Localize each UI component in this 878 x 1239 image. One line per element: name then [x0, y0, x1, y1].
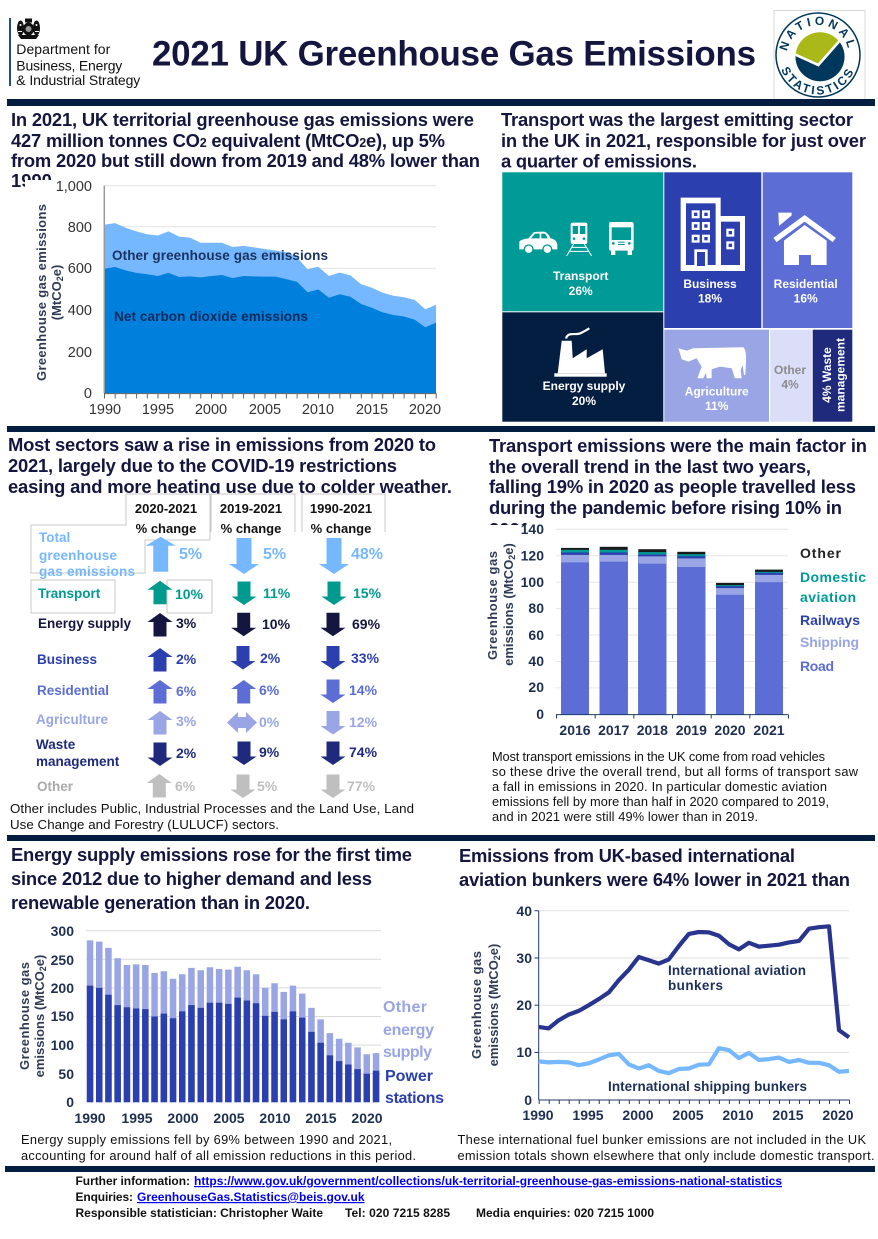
y axis labels	[51, 923, 74, 1110]
x axis labels: 2020	[822, 1107, 854, 1123]
bar: 2020	[716, 583, 744, 714]
footer: contact details: Tel: 020 7215 8285	[345, 1206, 450, 1220]
legend	[800, 545, 866, 674]
panel: sector changes	[8, 434, 452, 832]
y axis labels: 150	[51, 1008, 74, 1024]
panel: international bunkers	[458, 845, 874, 1163]
tile label: Business	[683, 277, 737, 291]
tile: agriculture	[664, 330, 769, 422]
heading: total emissions: from 2020 but still down from 2019 and 48% lower than	[11, 150, 480, 171]
y axis labels: 0	[66, 1094, 74, 1110]
y axis title	[34, 204, 65, 381]
tile: business	[664, 172, 761, 328]
y axis labels: 140	[521, 521, 544, 537]
panel: transport emissions	[480, 435, 875, 824]
label: Energy supply	[38, 616, 132, 631]
footer: contact details: https://www.gov.uk/government/collections/uk-territorial-greenhouse-gas-emissions-national-statistics	[194, 1174, 782, 1188]
x axis labels: 2019	[676, 722, 707, 738]
y axis labels: 800	[68, 220, 92, 236]
heading: sector changes: 2021, largely due to the COVID-19 restrictions	[8, 455, 397, 476]
row: agriculture: 12%	[349, 714, 378, 730]
logo divider line	[9, 18, 11, 86]
heading: energy supply: since 2012 due to higher demand and less	[11, 868, 372, 889]
row: business	[37, 646, 380, 672]
row: business: 2%	[176, 651, 197, 667]
heading: transport emissions: Transport emissions were the main factor in	[489, 435, 867, 456]
x axis labels: 2010	[259, 1110, 291, 1126]
tile label	[685, 384, 749, 413]
y axis title: emissions (MtCO	[32, 971, 47, 1077]
tile label: Energy supply	[543, 379, 626, 393]
y axis labels	[521, 521, 544, 722]
text block: bunkers note: emission totals shown elsewhere that only include domestic transport.	[458, 1148, 874, 1163]
heading: total emissions	[11, 109, 480, 191]
x axis labels	[74, 1110, 383, 1126]
text block: transport explanation: and in 2021 were still 49% lower than in 2019.	[492, 809, 758, 824]
footnote: other sectors: Use Change and Forestry (LULUCF) sectors.	[10, 817, 279, 832]
row: waste management: 74%	[349, 744, 378, 760]
column headers	[135, 501, 372, 536]
area: other greenhouse gas emissions	[104, 223, 436, 393]
y axis title: 2	[507, 555, 517, 560]
bar: 2019	[677, 552, 705, 714]
legend: Power	[385, 1068, 433, 1085]
heading: largest sector: Transport was the largest emitting sector	[501, 109, 853, 130]
y axis labels: 400	[68, 303, 92, 319]
heading: largest sector	[501, 109, 866, 172]
tile label	[683, 277, 737, 306]
tile label	[820, 338, 848, 412]
label	[39, 530, 135, 579]
icon: train	[567, 223, 592, 256]
icon: house	[775, 213, 834, 265]
row: business: 2%	[260, 650, 281, 666]
department name: Department for	[16, 41, 111, 57]
tile label	[543, 379, 626, 408]
area chart: emissions 1990-2021	[34, 179, 441, 418]
column headers: 1990-2021	[310, 501, 372, 516]
row: other	[37, 774, 376, 798]
icon: royal crest	[17, 18, 40, 39]
label: Business	[37, 652, 97, 667]
footer: contact details	[76, 1174, 782, 1220]
y axis labels: 200	[51, 980, 74, 996]
x axis labels: 2005	[213, 1110, 245, 1126]
text block: energy note: accounting for around half of all emission reductions in this period.	[21, 1148, 416, 1163]
tile label: Agriculture	[685, 384, 749, 398]
icon: factory	[554, 328, 607, 377]
x axis labels: 2020	[351, 1110, 383, 1126]
label	[36, 737, 120, 769]
row: total greenhouse gas emissions: 48%	[351, 546, 383, 563]
department name: Business, Energy	[16, 58, 122, 74]
tile label: 20%	[572, 394, 596, 408]
heading: bunkers: Emissions from UK-based international	[459, 845, 795, 866]
y axis title: e)	[501, 543, 516, 555]
heading: bunkers	[459, 845, 850, 890]
area: net carbon dioxide emissions	[104, 267, 436, 393]
footer: contact details: GreenhouseGas.Statistics@beis.gov.uk	[137, 1190, 365, 1204]
heading: energy supply: renewable generation than in 2020.	[11, 892, 310, 913]
text block: transport explanation: emissions fell by more than half in 2020 compared to 2019,	[492, 794, 829, 809]
bar: 2018	[638, 549, 666, 714]
x axis labels: 2015	[356, 402, 388, 418]
tile label: 4%	[781, 378, 799, 392]
x axis labels	[89, 402, 441, 418]
y axis labels: 1,000	[56, 179, 92, 195]
y axis title	[485, 543, 517, 666]
row: residential: 6%	[176, 683, 197, 699]
text block: bunkers note: These international fuel bunker emissions are not included in the UK	[458, 1132, 866, 1147]
label: Agriculture	[36, 712, 109, 727]
row: residential	[37, 680, 378, 704]
x axis labels: 2005	[249, 402, 281, 418]
tile: waste management	[813, 330, 852, 422]
icon: National Statistics logo: NATIONAL	[779, 16, 854, 51]
y axis labels: 250	[51, 952, 74, 968]
y axis title: Greenhouse gas emissions	[34, 204, 49, 381]
legend	[383, 999, 444, 1107]
x axis labels: 2000	[167, 1110, 199, 1126]
row: waste management	[36, 737, 378, 769]
legend: Other	[800, 545, 842, 561]
heading: total emissions: 427 million tonnes CO2 equivalent (MtCO2e), up 5%	[11, 130, 445, 151]
y axis labels: 40	[516, 903, 532, 919]
heading: transport emissions: 2021.	[489, 519, 535, 540]
row: other: 5%	[257, 778, 278, 794]
tile: transport	[502, 172, 663, 311]
tile label: 16%	[794, 292, 818, 306]
row: waste management: 9%	[259, 744, 280, 760]
footnote: other sectors: Other includes Public, Industrial Processes and the Land Use, Land	[10, 801, 414, 816]
x axis labels: 2015	[305, 1110, 337, 1126]
tile label	[774, 363, 806, 392]
label: Transport	[38, 586, 101, 601]
footnote: other sectors	[10, 801, 414, 832]
y axis title: Greenhouse gas	[17, 962, 32, 1070]
tile label: Transport	[553, 269, 608, 283]
series label: aviation: International aviation	[668, 963, 806, 978]
line: international shipping bunkers	[539, 1048, 849, 1073]
bar: 2017	[600, 547, 628, 714]
tile label	[774, 277, 838, 306]
row: agriculture: 0%	[259, 714, 280, 730]
icon: office buildings	[681, 198, 745, 271]
tile label: Residential	[774, 277, 838, 291]
x axis labels: 1995	[572, 1107, 604, 1123]
row: energy supply	[38, 613, 381, 636]
column headers: % change	[311, 521, 371, 536]
stacked bar chart: energy supply	[17, 923, 444, 1126]
legend: Railways	[800, 612, 860, 628]
heading: energy supply: Energy supply emissions rose for the first time	[11, 844, 412, 865]
text block: bunkers note	[458, 1132, 874, 1163]
row: energy supply: 3%	[176, 615, 197, 631]
row: transport: 10%	[175, 586, 204, 602]
y axis title: 2	[492, 955, 502, 960]
tile label	[553, 269, 608, 298]
heading: largest sector: in the UK in 2021, responsible for just over	[501, 130, 866, 151]
x axis labels: 2020	[714, 722, 746, 738]
y axis title	[469, 944, 502, 1066]
x axis labels	[522, 1107, 854, 1123]
y axis title: (MtCO	[49, 281, 64, 320]
text block: energy note	[21, 1132, 416, 1163]
row: agriculture	[36, 711, 378, 734]
heading: transport emissions: during the pandemic before rising 10% in	[489, 497, 842, 518]
column headers: 2019-2021	[220, 501, 282, 516]
department name	[16, 41, 140, 88]
y axis labels: 50	[58, 1066, 74, 1082]
tile: other	[770, 330, 812, 422]
tile label: management	[834, 338, 848, 412]
legend: supply	[383, 1044, 432, 1061]
column headers: % change	[221, 521, 281, 536]
x axis labels: 1995	[142, 402, 174, 418]
column headers: % change	[136, 521, 196, 536]
tile label: 4% Waste	[820, 347, 834, 403]
footer: contact details: Further information:	[76, 1174, 190, 1188]
bar: 2021	[755, 570, 783, 714]
panel: largest emitting sector	[498, 109, 870, 422]
row: energy supply: 69%	[352, 616, 381, 632]
icon: National Statistics logo	[774, 10, 866, 99]
panel: energy supply	[11, 844, 444, 1163]
legend: Shipping	[800, 634, 859, 650]
y axis title: e)	[486, 944, 501, 955]
y axis title: 2	[38, 966, 48, 971]
y axis labels	[56, 179, 92, 402]
x axis labels: 2010	[302, 402, 334, 418]
y axis labels: 20	[528, 679, 544, 695]
y axis labels: 40	[528, 653, 544, 669]
tile label: Other	[774, 363, 806, 377]
footer: contact details: Responsible statistician: Christopher Waite	[76, 1206, 323, 1220]
row: energy supply: 10%	[262, 616, 291, 632]
y axis labels: 300	[51, 923, 74, 939]
text block: energy note: Energy supply emissions fell by 69% between 1990 and 2021,	[21, 1132, 392, 1147]
x axis labels: 2020	[409, 402, 441, 418]
heading: total emissions: 1990.	[11, 170, 57, 191]
title: 2021 UK Greenhouse Gas Emissions	[152, 34, 756, 74]
row: waste management: 2%	[176, 745, 197, 761]
legend: Road	[800, 658, 834, 674]
x axis labels: 1990	[522, 1107, 554, 1123]
y axis labels: 600	[68, 261, 92, 277]
y axis labels	[516, 903, 532, 1108]
label: management	[36, 754, 120, 769]
series label: aviation	[668, 963, 806, 993]
line: international aviation bunkers	[539, 926, 849, 1037]
x axis labels: 1990	[89, 402, 121, 418]
series label: carbon dioxide: Net carbon dioxide emissions	[114, 309, 308, 324]
bars: other energy supply	[87, 940, 379, 1102]
label: Total	[39, 530, 70, 545]
row: residential: 14%	[349, 682, 378, 698]
x axis labels: 1995	[121, 1110, 153, 1126]
series label: other: Other greenhouse gas emissions	[112, 248, 328, 263]
y axis labels: 0	[84, 386, 92, 402]
y axis title: e)	[32, 955, 47, 966]
x axis labels: 2015	[772, 1107, 804, 1123]
tile: energy supply	[502, 312, 663, 422]
heading: sector changes: easing and more heating use due to colder weather.	[8, 476, 452, 497]
row: other: 77%	[347, 778, 376, 794]
heading: bunkers: aviation bunkers were 64% lower in 2021 than	[459, 869, 850, 890]
tile label: 26%	[569, 284, 593, 298]
legend: energy	[383, 1022, 434, 1039]
row: transport: 11%	[263, 585, 291, 601]
label: Other	[37, 779, 74, 794]
y axis title: Greenhouse gas	[469, 951, 484, 1059]
y axis title: Greenhouse gas	[485, 551, 500, 660]
y axis labels: 100	[51, 1037, 74, 1053]
y axis title	[17, 955, 48, 1077]
text block: transport explanation: so these drive the overall trend, but all forms of transport saw	[492, 764, 859, 779]
heading: transport emissions	[489, 435, 867, 540]
bar: 2016	[561, 548, 589, 714]
row: agriculture: 3%	[176, 713, 197, 729]
row: total greenhouse gas emissions: 5%	[263, 546, 286, 563]
heading: sector changes: Most sectors saw a rise in emissions from 2020 to	[8, 434, 436, 455]
y axis labels: 80	[528, 600, 544, 616]
header: department logo	[9, 18, 140, 88]
y axis title: emissions (MtCO	[486, 960, 501, 1066]
panel: total emissions	[11, 109, 490, 418]
column headers: 2020-2021	[135, 501, 197, 516]
row: other: 6%	[175, 778, 196, 794]
icon: car	[519, 232, 557, 254]
tile label: 18%	[698, 292, 722, 306]
x axis labels	[559, 722, 785, 738]
icon: National Statistics logo: STATISTICS	[782, 67, 853, 95]
footer: contact details: Media enquiries: 020 7215 1000	[476, 1206, 654, 1220]
legend: aviation	[800, 589, 856, 605]
heading: largest sector: a quarter of emissions.	[501, 150, 697, 172]
row: total greenhouse gas emissions	[39, 530, 383, 579]
heading: transport emissions: the overall trend in the last two years,	[489, 456, 811, 477]
icon: bus	[609, 222, 634, 255]
text block: transport explanation	[492, 749, 859, 824]
y axis labels: 10	[516, 1044, 532, 1060]
y axis labels: 0	[524, 1092, 532, 1108]
x axis labels: 2017	[598, 722, 629, 738]
y axis labels: 200	[68, 345, 92, 361]
label: greenhouse	[39, 548, 117, 563]
heading: sector changes	[8, 434, 452, 497]
legend: stations	[385, 1090, 444, 1107]
tile label: 11%	[705, 399, 729, 413]
y axis title: 2	[55, 276, 65, 281]
y axis labels: 100	[521, 574, 544, 590]
heading: energy supply	[11, 844, 412, 913]
x axis labels: 2000	[622, 1107, 654, 1123]
x axis labels: 2018	[637, 722, 668, 738]
y axis labels: 30	[516, 950, 532, 966]
legend: Domestic	[800, 569, 866, 585]
y axis labels: 120	[521, 548, 544, 564]
x axis labels: 2010	[722, 1107, 754, 1123]
row: transport	[38, 581, 382, 605]
row: transport: 15%	[353, 585, 382, 601]
heading: transport emissions: falling 19% in 2020 as people travelled less	[489, 476, 856, 497]
row: business: 33%	[351, 650, 380, 666]
icon: cow	[678, 347, 746, 378]
y axis title: emissions (MtCO	[501, 560, 516, 666]
row: residential: 6%	[259, 682, 280, 698]
bars: power stations	[87, 986, 379, 1102]
y axis title: e)	[49, 265, 64, 276]
label: Residential	[37, 683, 109, 698]
line chart: bunkers	[469, 903, 854, 1123]
label: Waste	[36, 737, 76, 752]
y axis labels: 20	[516, 997, 532, 1013]
x axis labels: 2005	[672, 1107, 704, 1123]
y axis labels: 0	[536, 706, 544, 722]
footer: contact details: Enquiries:	[76, 1190, 133, 1204]
x axis labels: 2021	[753, 722, 785, 738]
row: total greenhouse gas emissions: 5%	[179, 546, 202, 563]
legend: Other	[383, 999, 427, 1016]
y axis labels: 60	[528, 627, 544, 643]
heading: total emissions: In 2021, UK territorial greenhouse gas emissions were	[11, 109, 474, 130]
label: gas emissions	[39, 564, 135, 579]
x axis labels: 1990	[74, 1110, 106, 1126]
treemap: sector shares	[502, 172, 852, 422]
text block: transport explanation: Most transport emissions in the UK come from road vehicles	[492, 749, 825, 764]
tile: residential	[763, 172, 852, 328]
series label: shipping: International shipping bunkers	[608, 1079, 807, 1094]
x axis labels: 2000	[195, 402, 227, 418]
department name: & Industrial Strategy	[16, 72, 140, 88]
series label: aviation: bunkers	[668, 978, 723, 993]
text block: transport explanation: a fall in emissions in 2020. In particular domestic aviation	[492, 779, 827, 794]
x axis labels: 2016	[559, 722, 591, 738]
stacked bar chart: transport by mode	[485, 521, 866, 738]
